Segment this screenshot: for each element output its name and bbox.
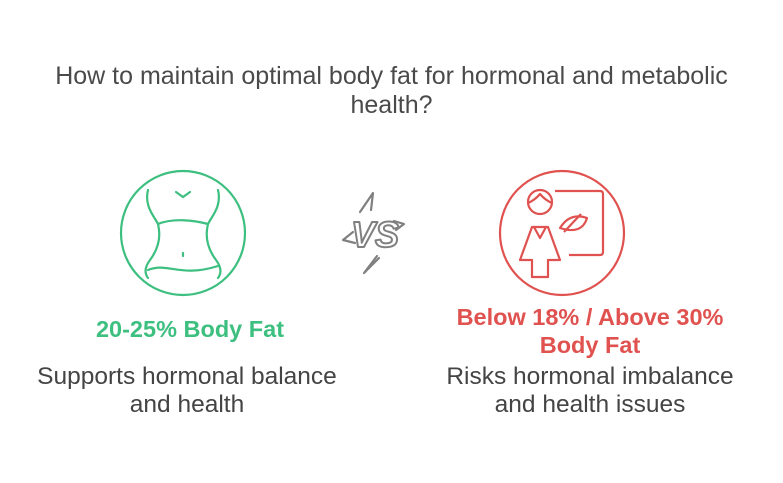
- heading: red: [457, 304, 723, 358]
- text: green desc: and health: [130, 391, 244, 418]
- text: red desc: [446, 363, 734, 418]
- icon: person with pill board: [498, 170, 626, 296]
- heading: green: 20-25% Body Fat: [96, 316, 284, 342]
- text: green desc: Supports hormonal balance: [37, 363, 337, 390]
- text: red desc: Risks hormonal imbalance: [446, 363, 734, 390]
- icon: waist: [120, 170, 246, 296]
- icon: vs: VS: [351, 214, 399, 255]
- title: How to maintain optimal body fat for hormonal and metabolic: [55, 62, 728, 90]
- heading: red: Below 18% / Above 30%: [457, 304, 723, 330]
- heading: red: Body Fat: [540, 332, 640, 358]
- icon: vs: [342, 192, 406, 274]
- text: green desc: [37, 363, 337, 418]
- title: health?: [350, 91, 433, 119]
- text: red desc: and health issues: [495, 391, 685, 418]
- title: [55, 62, 728, 119]
